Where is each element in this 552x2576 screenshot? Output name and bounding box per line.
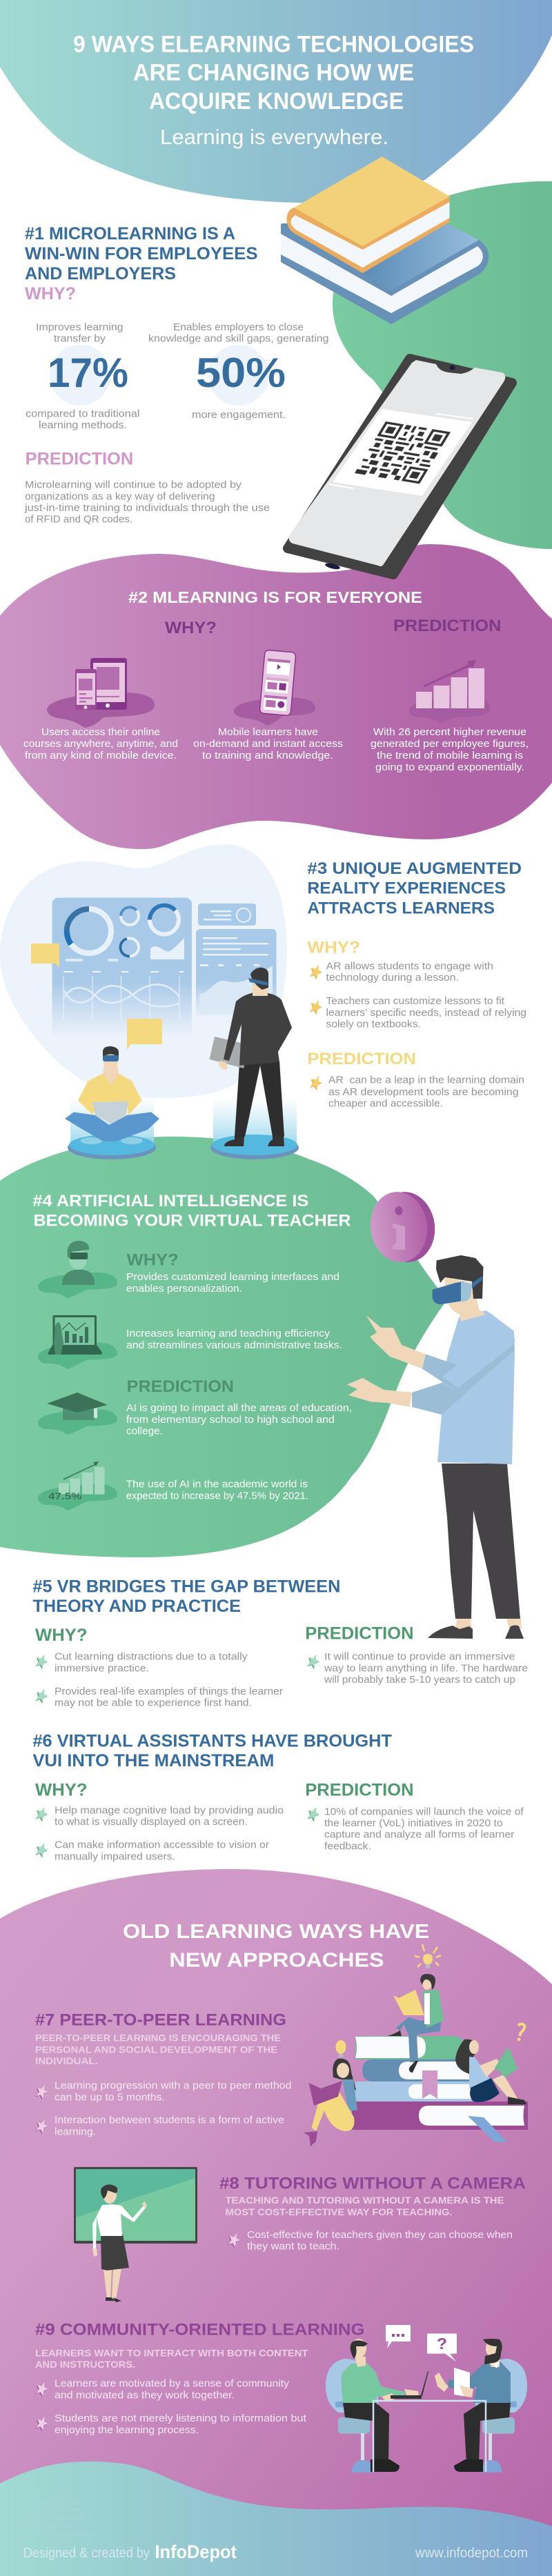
subheading: section 7: PEER-TO-PEER LEARNING IS ENCOURAGING THE: [35, 2033, 281, 2044]
text: revenue prediction: the trend of mobile learning is: [377, 750, 523, 761]
panel: section 2 mlearning: [23, 588, 529, 773]
why heading: WHY?: [127, 1250, 179, 1269]
icon: laptop teacher: [38, 1315, 117, 1369]
prediction text: organizations as a key way of delivering: [25, 491, 215, 502]
background blob: purple section 2: [0, 544, 552, 849]
text: AI impact: college.: [126, 1426, 163, 1437]
title: ARE CHANGING HOW WE: [133, 59, 414, 86]
heading: section 3: REALITY EXPERIENCES: [307, 879, 506, 898]
panel: section 1 microlearning: [24, 224, 328, 526]
bullet: AR engagement: AR allows students to engage with: [326, 960, 493, 972]
text: revenue prediction: [371, 726, 529, 773]
text: revenue prediction: generated per employee figures,: [371, 738, 529, 750]
bullet: VoL prediction: feedback.: [324, 1840, 371, 1852]
prediction heading: PREDICTION: [26, 450, 133, 469]
icon: tablet and phone: [47, 658, 155, 728]
text: users access: [23, 726, 178, 761]
panel: section 8 tutoring: [219, 2175, 526, 2252]
illustration: seated AR learner: [65, 1046, 159, 1159]
bullet: real-life examples: may not be able to experience first hand.: [55, 1697, 252, 1709]
stat: 50 percent: more engagement.: [192, 409, 286, 421]
icon: QR code: [355, 421, 451, 484]
text: AI impact: AI is going to impact all the areas of education,: [126, 1403, 352, 1414]
subheading: section 7: PERSONAL AND SOCIAL DEVELOPMENT OF THE: [35, 2044, 277, 2055]
bullet: community motivation: [34, 2378, 290, 2401]
stat: 17 percent: compared to traditional: [26, 408, 139, 420]
bullet: accessibility: Can make information accessible to vision or: [55, 1839, 269, 1851]
subheading: section 9: AND INSTRUCTORS.: [35, 2359, 135, 2370]
bullet: learning progression: Learning progression with a peer to peer method: [55, 2079, 291, 2091]
text: users access: courses anywhere, anytime, and: [23, 738, 178, 750]
stat: 17 percent: learning methods.: [39, 419, 127, 431]
stat: 50 percent: [148, 321, 328, 421]
bullet: customize lessons: learners' specific needs, instead of relying: [326, 1007, 526, 1019]
text: customized interfaces: [126, 1272, 339, 1295]
bullet: AR leap: [308, 1074, 524, 1110]
heading: old learning ways: [123, 1921, 429, 1972]
bullet: VoL prediction: [305, 1805, 524, 1852]
heading: section 5: [32, 1577, 340, 1616]
panel: section 3 augmented reality: [307, 859, 526, 1110]
bullet: learning progression: can be up to 5 months.: [55, 2091, 165, 2103]
background blob: light blue section 3: [0, 844, 287, 1098]
background blob: green section 4: [0, 1137, 447, 1557]
illustration: man wearing VR headset: [347, 1255, 524, 1639]
footer: sources: Source:: [24, 2490, 47, 2498]
steel blue book: [362, 2059, 472, 2099]
subheading: section 9: LEARNERS WANT TO INTERACT WITH BOTH CONTENT: [35, 2348, 308, 2359]
text: AI impact: from elementary school to high school and: [126, 1415, 335, 1426]
text: users access: Users access their online: [41, 726, 160, 738]
glass table: [373, 2401, 486, 2472]
text: users access: from any kind of mobile device.: [25, 750, 177, 761]
footer: sources: skillscouter.com: [24, 2522, 75, 2530]
bullet: learning progression: [34, 2079, 291, 2103]
background blob: purple lower section: [0, 1869, 552, 2576]
callout: yellow speech bubble centre: [127, 1019, 162, 1050]
heading: section 9: #9 COMMUNITY-ORIENTED LEARNING: [35, 2320, 365, 2339]
icon: graduation cap: [38, 1392, 117, 1435]
callout: question bubble: ?: [437, 2335, 447, 2353]
chairs: [326, 2359, 527, 2473]
man in blue sweater: [435, 2339, 511, 2472]
bullet: VR prediction: It will continue to provide an immersive: [324, 1651, 515, 1663]
heading: section 1: WIN-WIN FOR EMPLOYEES: [25, 244, 258, 263]
bullet: AR leap: cheaper and accessible.: [328, 1098, 443, 1110]
heading: section 6: [32, 1731, 392, 1770]
bullet: enjoying learning: enjoying the learning process.: [55, 2424, 199, 2436]
prediction text: [24, 479, 270, 526]
bullet: VR prediction: way to learn anything in life. The hardware: [324, 1662, 528, 1674]
heading: section 3: #3 UNIQUE AUGMENTED: [307, 859, 522, 878]
bullet: cognitive load: Help manage cognitive load by providing audio: [55, 1804, 284, 1816]
heading: section 4: #4 ARTIFICIAL INTELLIGENCE IS: [32, 1192, 308, 1210]
bullet: customize lessons: Teachers can customize lessons to fit: [326, 995, 505, 1007]
prediction heading: PREDICTION: [127, 1377, 234, 1396]
footer: sources: apasseducation.com: [24, 2513, 89, 2522]
illustration: standing AR user: [210, 968, 299, 1159]
footer: sources: www.docebo.com: [23, 2498, 80, 2506]
illustration: students on stacked books: [304, 1974, 528, 2146]
text: mobile learners: Mobile learners have: [218, 726, 318, 738]
icon: rising bar chart: [409, 660, 490, 723]
bullet: cognitive load: to what is visually displayed on a screen.: [55, 1816, 248, 1828]
bullet: AR engagement: technology during a lesson.: [326, 972, 459, 984]
bullet: AR leap: AR can be a leap in the learning domain: [328, 1075, 524, 1086]
bullet: distractions: Cut learning distractions due to a totally: [55, 1651, 248, 1663]
subheading: section 8: MOST COST-EFFECTIVE WAY FOR TEACHING.: [225, 2207, 453, 2217]
bullet: accessibility: manually impaired users.: [55, 1850, 175, 1862]
icon: info badge: [366, 1188, 440, 1266]
bullet: customize lessons: [308, 995, 526, 1030]
text: mobile learners: [193, 726, 343, 761]
footer: credit: Designed & created by: [23, 2546, 150, 2561]
text: mobile learners: on-demand and instant access: [193, 738, 343, 750]
background blob: header: [0, 0, 552, 203]
background blob: green right: [333, 181, 552, 549]
panel: section 5 VR: [32, 1577, 528, 1709]
bullet: AR leap: as AR development tools are becoming: [328, 1086, 519, 1098]
heading: section 1: [25, 224, 258, 283]
bullet: VR prediction: will probably take 5-10 years to catch up: [324, 1674, 515, 1686]
footer: sources: elearningindustry.com: [24, 2530, 95, 2538]
laptop: [391, 2371, 428, 2399]
stat: 50 percent: 50%: [196, 350, 286, 396]
stat: 17 percent: transfer by: [54, 332, 106, 345]
reader on left: [304, 2040, 357, 2146]
bullet: real-life examples: Provides real-life examples of things the learner: [55, 1686, 283, 1697]
bullet: enjoying learning: Students are not merely listening to information but: [55, 2413, 307, 2424]
subheading: section 8: TEACHING AND TUTORING WITHOUT A CAMERA IS THE: [225, 2195, 504, 2206]
bullet: VoL prediction: 10% of companies will launch the voice of: [324, 1806, 524, 1817]
title: 9 WAYS ELEARNING TECHNOLOGIES: [73, 32, 474, 58]
callout: ellipsis bubble: [386, 2325, 411, 2348]
man in green sweater: [342, 2339, 419, 2472]
why heading: WHY?: [165, 619, 217, 637]
bullet: active learning: [34, 2115, 284, 2137]
bottom purple book: [352, 2101, 528, 2142]
text: AI growth: The use of AI in the academic world is: [126, 1479, 308, 1490]
subtitle: Learning is everywhere.: [160, 125, 388, 149]
prediction heading: PREDICTION: [305, 1624, 414, 1644]
heading: section 8: #8 TUTORING WITHOUT A CAMERA: [219, 2175, 526, 2193]
footer: sources: [23, 2490, 95, 2538]
title: [73, 32, 474, 114]
stat: 17 percent: [26, 321, 139, 431]
footer: website: www.infodepot.com: [415, 2546, 528, 2561]
footer: credit: InfoDepot: [155, 2542, 237, 2562]
heading: old learning ways: OLD LEARNING WAYS HAVE: [123, 1921, 429, 1943]
icon: growth bars 47.5 percent: [38, 1461, 117, 1510]
bullet: accessibility: [34, 1839, 269, 1862]
prediction text: of RFID and QR codes.: [25, 514, 132, 526]
footer: credit: [23, 2542, 237, 2562]
text: AI growth: expected to increase by 47.5% by 2021.: [126, 1491, 308, 1502]
reader on right: [455, 2024, 526, 2104]
heading: section 6: #6 VIRTUAL ASSISTANTS HAVE BROUGHT: [32, 1731, 392, 1750]
icon: phone with QR code: [288, 359, 512, 575]
icon: tilted phone: [234, 650, 315, 726]
callout: question bubble: [427, 2334, 457, 2362]
light blue book: [355, 2081, 472, 2101]
panel: section 7 peer-to-peer: [34, 2011, 291, 2137]
text: mobile learners: to training and knowledge.: [202, 750, 333, 761]
subheading: section 7: INDIVIDUAL.: [35, 2056, 98, 2066]
prediction heading: PREDICTION: [393, 617, 501, 635]
text: customized interfaces: Provides customized learning interfaces and: [126, 1272, 339, 1283]
why heading: WHY?: [25, 284, 76, 303]
background blob: footer wave: [0, 2462, 552, 2576]
bullet: community motivation: Learners are motivated by a sense of community: [55, 2378, 290, 2390]
heading: section 5: THEORY AND PRACTICE: [32, 1597, 241, 1616]
why heading: WHY?: [35, 1781, 87, 1800]
subheading: section 9: [35, 2348, 308, 2370]
bullet: VoL prediction: the learner (VoL) initiatives in 2020 to: [324, 1817, 503, 1829]
stat: 50 percent: Enables employers to close: [173, 321, 304, 333]
heading: old learning ways: NEW APPROACHES: [169, 1950, 384, 1972]
heading: section 4: BECOMING YOUR VIRTUAL TEACHER: [33, 1212, 351, 1230]
bullet: enjoying learning: [34, 2413, 307, 2436]
text: efficiency: Increases learning and teaching efficiency: [126, 1328, 331, 1339]
heading: section 1: #1 MICROLEARNING IS A: [25, 224, 235, 243]
bullet: cost-effective: they want to teach.: [247, 2240, 339, 2252]
heading: section 7: #7 PEER-TO-PEER LEARNING: [35, 2011, 286, 2030]
callout: yellow speech bubble left: [31, 943, 59, 968]
subheading: section 7: [35, 2033, 281, 2066]
bullet: cost-effective: [226, 2229, 513, 2252]
icon: light bulb: [415, 1944, 441, 1968]
why heading: WHY?: [35, 1626, 87, 1645]
bullet: AR engagement: [308, 960, 493, 984]
text: customized interfaces: enables personalization.: [126, 1284, 242, 1295]
heading: section 3: ATTRACTS LEARNERS: [307, 899, 495, 917]
subheading: section 8: [225, 2195, 504, 2217]
reader on top: [387, 1974, 444, 2073]
heading: section 4: [32, 1192, 351, 1230]
bullet: active learning: Interaction between students is a form of active: [55, 2115, 284, 2126]
bullet: VR prediction: [305, 1651, 528, 1686]
green book: [355, 2036, 464, 2059]
panel: section 9 community: [34, 2320, 365, 2436]
prediction heading: PREDICTION: [307, 1050, 416, 1068]
bullet: cost-effective: Cost-effective for teachers given they can choose when: [247, 2229, 513, 2241]
bullet: distractions: [34, 1651, 248, 1674]
bullet: real-life examples: [34, 1686, 283, 1709]
heading: section 1: AND EMPLOYERS: [25, 264, 176, 283]
bullet: customize lessons: solely on textbooks.: [326, 1019, 421, 1030]
stat: 50 percent: knowledge and skill gaps, generating: [148, 332, 328, 345]
heading: section 3: [307, 859, 522, 917]
bullet: distractions: immersive practice.: [55, 1662, 149, 1674]
text: AI impact: [126, 1403, 352, 1437]
stat: 17 percent: Improves learning: [36, 321, 124, 333]
icon: VR person: [38, 1241, 117, 1298]
illustration: AR dashboard: [52, 898, 276, 1037]
text: AI growth: [126, 1479, 308, 1502]
illustration: two people meeting at a table: [326, 2325, 527, 2473]
bullet: cognitive load: [34, 1804, 284, 1828]
heading: section 5: #5 VR BRIDGES THE GAP BETWEEN: [32, 1577, 340, 1596]
text: efficiency: and streamlines various administrative tasks.: [126, 1340, 342, 1351]
footer: sources: blog.capterra.com: [24, 2506, 81, 2514]
text: efficiency: [126, 1328, 342, 1351]
panel: section 6 virtual assistants: [32, 1731, 524, 1862]
prediction heading: PREDICTION: [305, 1781, 414, 1800]
illustration: teacher at board: [74, 2167, 197, 2302]
icon: stacked books: [281, 157, 489, 324]
panel: section 4 artificial intelligence: [32, 1192, 352, 1510]
bullet: community motivation: and motivated as they work together.: [55, 2389, 235, 2401]
heading: section 2: #2 MLEARNING IS FOR EVERYONE: [128, 588, 422, 606]
prediction text: just-in-time training to individuals through the use: [24, 502, 270, 514]
bullet: active learning: learning.: [55, 2126, 96, 2137]
text: revenue prediction: going to expand exponentially.: [375, 761, 524, 773]
heading: section 6: VUI INTO THE MAINSTREAM: [32, 1751, 274, 1770]
icon: growth bars 47.5 percent: 47.5%: [48, 1490, 82, 1501]
title: ACQUIRE KNOWLEDGE: [149, 88, 404, 114]
why heading: WHY?: [307, 939, 360, 957]
text: revenue prediction: With 26 percent higher revenue: [373, 726, 526, 738]
stat: 17 percent: 17%: [48, 350, 128, 396]
bullet: VoL prediction: capture and analyze all forms of learner: [324, 1829, 514, 1841]
prediction text: Microlearning will continue to be adopted by: [25, 479, 242, 491]
